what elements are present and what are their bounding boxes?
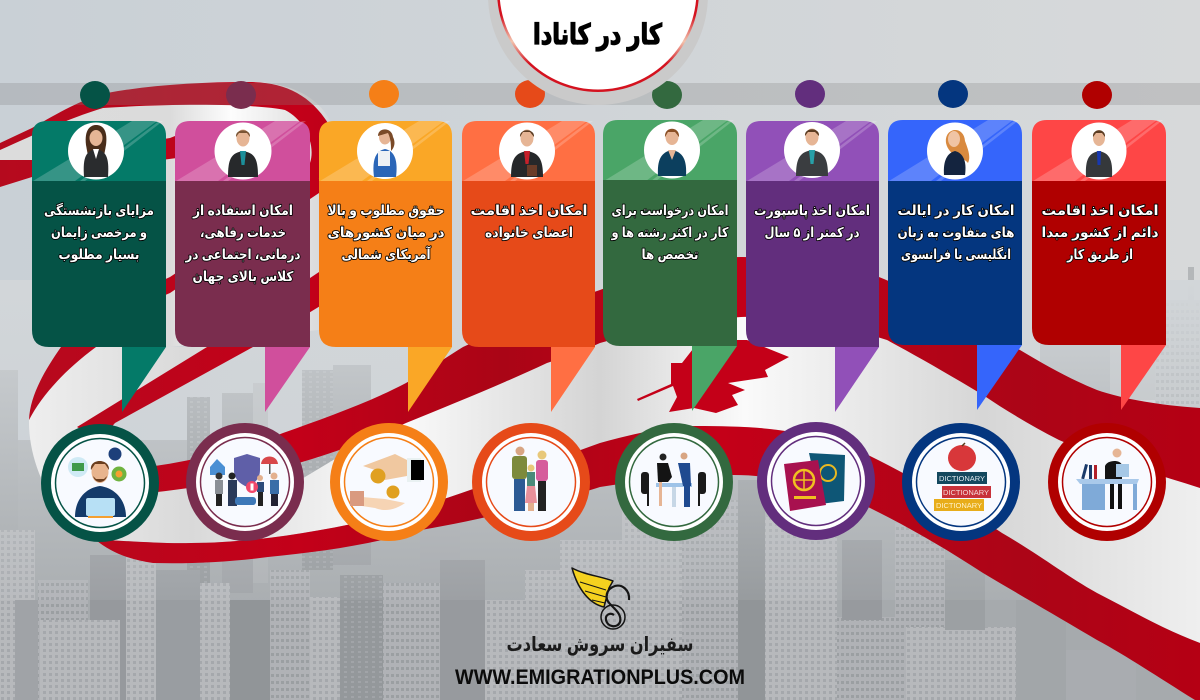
website url: WWW.EMIGRATIONPLUS.COM [455,666,745,689]
text: permanent residency [1042,203,1159,262]
text: work application [611,203,729,262]
ribbon: upper red arc [0,82,333,193]
step dots [80,80,1112,109]
panel: good salary [319,121,452,412]
icon: apple and books [934,443,991,511]
ribbon: outer loop red strip [29,178,319,420]
title: کار در کانادا [533,19,663,51]
background: haze over skyline [0,280,1200,600]
icon: family [512,446,548,511]
text: welfare services [185,203,301,284]
avatar: woman with red hair [927,122,983,180]
avatar: man with folder [499,122,555,180]
text: welfare services: امکان استفاده از [192,203,293,218]
icon: apple and books: DICTIONARY [936,501,982,510]
badge: family icon [472,423,590,541]
text: retirement benefits: و مرخصی زایمان [51,225,147,240]
text: family residency [470,203,588,240]
avatar: woman with papers [357,123,413,179]
icon: man with laptop [68,448,126,518]
text: family residency: امکان اخذ اقامت [470,203,588,218]
title badge [488,0,708,105]
panel: permanent residency [1032,120,1166,410]
icon: maple leaf [637,340,789,413]
text: passport: در کمتر از ۵ سال [764,225,860,240]
top connector band [0,83,1200,105]
text: good salary: آمریکای شمالی [342,246,431,262]
text: work application: کار در اکثر رشته ها و [611,225,729,240]
badge: dictionary icon [902,423,1020,541]
badge: retirement icon [41,424,159,542]
icon: hands and coins [350,454,424,510]
panel: welfare services [175,121,310,412]
icon: shield, family, house, car [210,454,279,506]
badge: office icon [1048,423,1166,541]
ribbon: white main sweep [29,300,1200,643]
text: passport [754,203,870,240]
text: work in provinces: های متفاوت به زبان [898,225,1014,240]
logo: winged emblem [572,568,629,629]
badge: welfare icon [186,423,304,541]
icon: passports [784,453,845,511]
text: retirement benefits: مزایای بازنشستگی [44,202,154,218]
avatar: businesswoman [68,122,124,180]
avatar: man with blue tie [1072,122,1126,180]
panel: family residency [462,121,595,412]
text: passport: امکان اخذ پاسپورت [754,203,870,218]
panel: work application [603,120,737,411]
avatar: man in dark suit [784,122,840,178]
text: work in provinces: انگلیسی یا فرانسوی [901,246,1011,262]
icon: apple and books: DICTIONARY [939,474,985,483]
text: retirement benefits [44,202,154,262]
text: work in provinces [898,203,1014,262]
ribbon: left red band [0,130,200,187]
text: welfare services: کلاس بالای جهان [192,269,294,284]
text: permanent residency: از طریق کار [1066,247,1133,262]
badge: passport icon [757,422,875,540]
logo: company name: سفیران سروش سعادت [506,634,694,656]
text: good salary: حقوق مطلوب و بالا [328,203,444,218]
text: permanent residency: دائم از کشور مبدا [1042,225,1159,240]
text: good salary: در میان کشورهای [328,225,445,240]
avatar: man with glasses [214,122,272,180]
text: welfare services: خدمات رفاهی، [200,225,286,240]
text: permanent residency: امکان اخذ اقامت [1042,203,1158,218]
text: work application: تخصص ها [642,247,698,262]
ribbon: inner red strip [77,272,330,440]
badge: salary icon [330,423,448,541]
text: family residency: اعضای خانواده [485,225,573,240]
text: retirement benefits: بسیار مطلوب [58,247,140,262]
text: good salary [328,203,445,262]
ribbon: main lower red strip [96,426,1200,700]
text: welfare services: درمانی، اجتماعی در [185,247,301,262]
ribbon: main upper red strip [140,257,1200,494]
panel: work in provinces [888,120,1022,410]
avatar: woman in teal suit [644,122,700,178]
ribbon: white upper fold [0,82,335,347]
text: work application: امکان درخواست برای [612,203,728,218]
background: grey wash over lower skyline [0,470,1200,700]
badge: handshake icon [615,423,733,541]
panel: retirement benefits [32,121,166,412]
icon: apple and books: DICTIONARY [943,488,989,497]
background: city skyline [0,267,1200,700]
icon: man at desk [1076,448,1139,510]
icon: meeting at table [641,452,706,507]
panel: passport [746,121,879,412]
text: work in provinces: امکان کار در ایالت [898,203,1014,218]
